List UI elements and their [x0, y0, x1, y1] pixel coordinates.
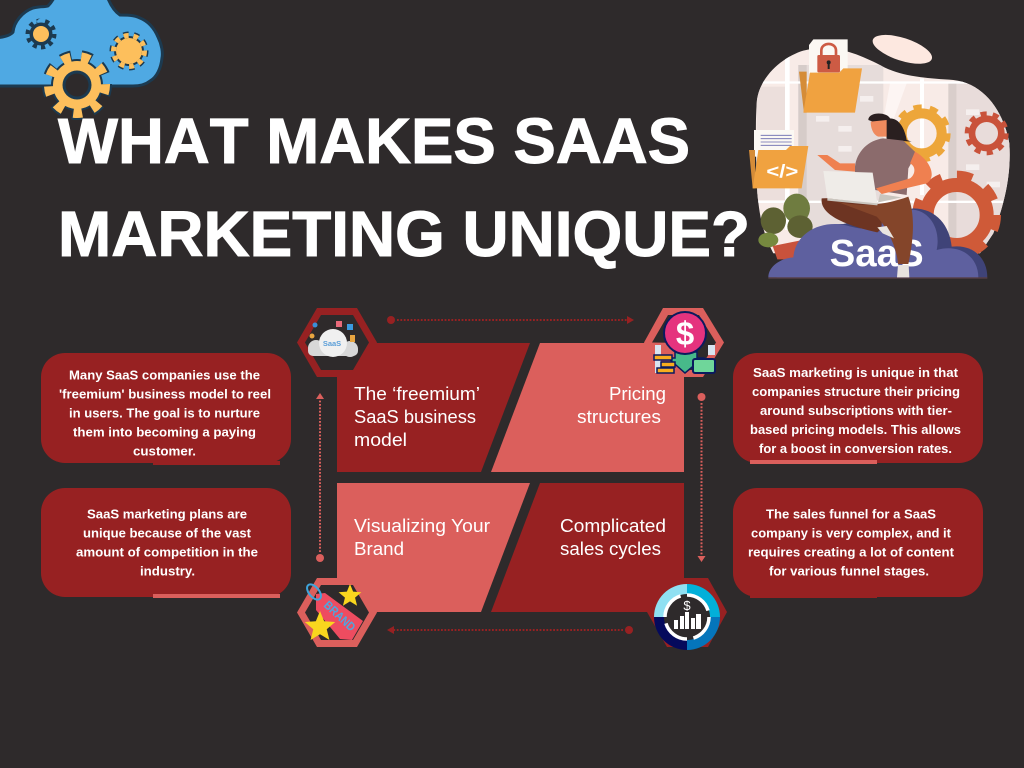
panel: pricing box: based pricing models. This allows — [750, 423, 961, 437]
label: SaaS: SaaS — [830, 233, 924, 275]
panel: pricing box — [733, 353, 983, 464]
panel: sales funnel box: requires creating a lot of content — [748, 546, 955, 560]
panel: visualizing your brand — [337, 483, 530, 612]
panel: brand box: industry. — [140, 564, 195, 578]
cloud — [777, 208, 987, 277]
arrow: right — [698, 393, 706, 562]
panel: freemium model: The ‘freemium’ — [354, 384, 480, 404]
arrow: top — [387, 316, 634, 324]
panel: brand box — [41, 488, 291, 598]
panel: freemium model: model — [354, 430, 407, 450]
arrow: left — [316, 393, 324, 562]
panel: visualizing your brand: Visualizing Your — [354, 516, 490, 536]
panel: brand box: unique because of the vast — [83, 526, 252, 540]
panel: pricing box: for a boost in conversion rates. — [759, 442, 952, 456]
icon: pricing dollar hexagon — [644, 308, 724, 377]
panel: pricing structures: structures — [577, 407, 661, 427]
arrow: bottom — [387, 626, 633, 634]
woman — [817, 114, 932, 277]
panel: freemium box — [41, 353, 291, 465]
icon: brand tag hexagon: BRAND — [321, 598, 358, 634]
panel: freemium box: Many SaaS companies use the — [69, 368, 260, 382]
panel: freemium box: customer. — [133, 444, 196, 458]
title: WHAT MAKES SAAS — [58, 105, 690, 177]
panel: sales funnel box: company is very complex, and it — [751, 526, 952, 540]
panel: brand box: amount of competition in the — [76, 546, 258, 560]
panel: freemium model — [337, 343, 530, 472]
icon: SaaS cloud hexagon — [297, 308, 377, 377]
title: MARKETING UNIQUE? — [58, 198, 750, 270]
panel: freemium box: them into becoming a paying — [73, 426, 256, 440]
panel: brand box: SaaS marketing plans are — [87, 508, 247, 522]
panel: freemium box: in users. The goal is to nurture — [69, 406, 260, 420]
panel: pricing box: SaaS marketing is unique in that — [753, 366, 959, 380]
panel: pricing structures — [491, 343, 684, 472]
gears — [896, 108, 947, 159]
icon: SaaS cloud hexagon: SaaS — [323, 339, 341, 348]
panel: freemium model: SaaS business — [354, 407, 476, 427]
icon: sales chart hexagon — [647, 578, 727, 650]
left folder with code — [754, 130, 794, 157]
title — [58, 105, 750, 270]
panel: pricing box: around subscriptions with tier- — [760, 404, 952, 418]
panel: complicated sales cycles — [491, 483, 684, 612]
panel: visualizing your brand: Brand — [354, 539, 404, 559]
icon: pricing dollar hexagon: $ — [676, 315, 694, 352]
panel: complicated sales cycles: sales cycles — [560, 539, 661, 559]
icon: brand tag hexagon — [297, 578, 377, 647]
panel: sales funnel box: The sales funnel for a SaaS — [766, 508, 936, 522]
top folder with lock — [809, 39, 848, 73]
panel: pricing structures: Pricing — [609, 384, 666, 404]
plant — [783, 194, 810, 223]
illustration: SaaS woman with laptop: </> — [766, 160, 798, 181]
panel: pricing box: companies structure their pricing — [752, 385, 960, 399]
panel: complicated sales cycles: Complicated — [560, 516, 666, 536]
icon: cloud with gears — [0, 0, 162, 111]
panel: sales funnel box — [733, 488, 983, 598]
panel: freemium box: 'freemium' business model to reel — [59, 388, 271, 402]
illustration: SaaS woman with laptop — [749, 34, 1010, 279]
icon: sales chart hexagon: $ — [683, 598, 691, 613]
panel: sales funnel box: for various funnel stages. — [769, 564, 929, 578]
